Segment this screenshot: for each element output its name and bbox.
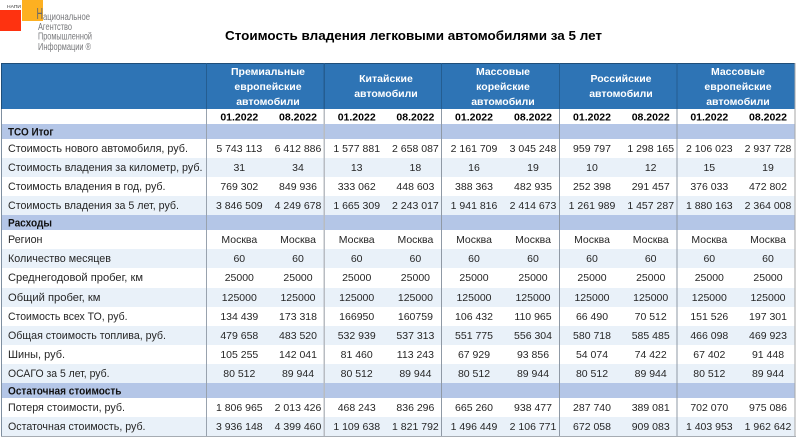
row: Стоимость всех ТО: Стоимость всех ТО, руб. (8, 311, 128, 323)
row: Количество месяцев: 60 (762, 253, 774, 265)
row: Регион: Москва (750, 234, 786, 246)
row: Общая стоимость топлива: 551 775 (455, 330, 493, 342)
row: Потеря стоимости: 468 243 (338, 402, 376, 414)
column heading: Массовые европейские автомобили (704, 66, 772, 108)
column heading: Российские автомобили: автомобили (589, 88, 653, 100)
row: Остаточная стоимость: Остаточная стоимость, руб. (8, 421, 146, 433)
row: Стоимость владения в год: 482 935 (514, 181, 552, 193)
column heading: Китайские автомобили: автомобили (354, 88, 418, 100)
row: Стоимость нового автомобиля: Стоимость нового автомобиля, руб. (8, 143, 188, 155)
row: ОСАГО за 5 лет: 89 944 (282, 368, 314, 380)
row: Общая стоимость топлива: 580 718 (573, 330, 611, 342)
date row: 01.2022 (338, 112, 376, 124)
row: Среднегодовой пробег: 25000 (695, 272, 724, 284)
row: Шины: 81 460 (341, 349, 373, 361)
row: Регион: Регион (8, 234, 42, 246)
row: Общий пробег: 125000 (339, 292, 374, 304)
row: Потеря стоимости: 389 081 (632, 402, 670, 414)
column heading: Массовые европейские автомобили: европейские (704, 81, 772, 93)
row: Стоимость владения за 5 лет: 1 941 816 (451, 200, 498, 212)
row: Остаточная стоимость: 1 109 638 (333, 421, 380, 433)
row: Потеря стоимости: 836 296 (396, 402, 435, 414)
row: Стоимость владения за километр: 12 (645, 162, 657, 174)
row: Общая стоимость топлива: 466 098 (690, 330, 728, 342)
row: ОСАГО за 5 лет: 80 512 (458, 368, 490, 380)
logo: Промышленной (38, 32, 92, 42)
row: Регион: Москва (574, 234, 610, 246)
row: Стоимость нового автомобиля: 2 161 709 (451, 143, 498, 155)
row: Стоимость владения в год: 252 398 (573, 181, 611, 193)
row: Шины: 67 402 (693, 349, 726, 361)
row: Общий пробег: Общий пробег, км (8, 292, 100, 304)
row: Регион: Москва (339, 234, 375, 246)
section band: Расходы (1, 215, 795, 230)
row: Количество месяцев: Количество месяцев (8, 253, 111, 265)
logo (0, 0, 92, 53)
row: Потеря стоимости: 702 070 (690, 402, 728, 414)
row: Стоимость владения за 5 лет: 1 880 163 (686, 200, 733, 212)
row: Регион: Москва (691, 234, 727, 246)
row: Потеря стоимости: 1 806 965 (216, 402, 263, 414)
column heading: Российские автомобили: Российские (590, 73, 652, 85)
row: Потеря стоимости: 975 086 (749, 402, 787, 414)
row: Количество месяцев: 60 (468, 253, 480, 265)
row: Количество месяцев: 60 (586, 253, 598, 265)
row: Стоимость владения за 5 лет: 2 364 008 (745, 200, 792, 212)
row: ОСАГО за 5 лет: 89 944 (517, 368, 549, 380)
logo: Агентство (38, 22, 72, 33)
row: Стоимость владения в год: 849 936 (279, 181, 317, 193)
row: Количество месяцев: 60 (351, 253, 363, 265)
row: Остаточная стоимость: 909 083 (632, 421, 670, 433)
row: Общий пробег: 125000 (280, 292, 316, 304)
row: Потеря стоимости: 2 013 426 (275, 402, 322, 414)
date row: 08.2022 (632, 112, 670, 124)
row: Количество месяцев: 60 (233, 253, 245, 265)
row: Стоимость владения в год: 388 363 (455, 181, 493, 193)
logo: ациональное (43, 12, 90, 23)
row: Регион: Москва (456, 234, 492, 246)
row: Общий пробег: 125000 (456, 292, 492, 304)
row: Стоимость владения в год: 472 802 (749, 181, 787, 193)
row: Шины: 142 041 (279, 349, 317, 361)
column heading: Российские автомобили (589, 73, 653, 100)
row: Стоимость владения за 5 лет: 1 261 989 (569, 200, 616, 212)
row: Остаточная стоимость (8, 421, 792, 433)
row: Остаточная стоимость: 1 403 953 (686, 421, 733, 433)
row: Среднегодовой пробег: 25000 (577, 272, 607, 284)
row: Потеря стоимости: 665 260 (455, 402, 493, 414)
row: Шины: 113 243 (397, 349, 434, 361)
row: Стоимость нового автомобиля: 5 743 113 (216, 143, 262, 155)
row: Регион: Москва (280, 234, 316, 246)
row: Количество месяцев: 60 (703, 253, 715, 265)
row: Общий пробег: 125000 (222, 292, 257, 304)
row: Стоимость нового автомобиля: 2 937 728 (745, 143, 792, 155)
date row: 01.2022 (690, 112, 728, 124)
row: Стоимость нового автомобиля: 3 045 248 (510, 143, 557, 155)
row: Стоимость владения за километр: Стоимость владения за километр, руб. (8, 162, 202, 174)
row: ОСАГО за 5 лет: 80 512 (341, 368, 373, 380)
row: Среднегодовой пробег (8, 272, 783, 284)
row: Стоимость владения в год: 769 302 (220, 181, 258, 193)
row: Количество месяцев: 60 (645, 253, 657, 265)
row: Шины: 105 255 (220, 349, 258, 361)
row: ОСАГО за 5 лет: 89 944 (399, 368, 432, 380)
column heading: Массовые европейские автомобили: автомобили (706, 96, 770, 108)
row: Шины: 91 448 (752, 349, 784, 361)
row: Шины: 74 422 (635, 349, 667, 361)
column heading: Массовые корейские автомобили: корейские (476, 81, 530, 93)
date row: 01.2022 (220, 112, 258, 124)
row: Стоимость владения за километр: 19 (762, 162, 774, 174)
row: Стоимость владения за километр (8, 162, 774, 174)
row: Стоимость нового автомобиля: 6 412 886 (275, 143, 322, 155)
row: Стоимость всех ТО: 151 526 (690, 311, 728, 323)
row: Потеря стоимости (8, 402, 787, 414)
row: Стоимость всех ТО: 160759 (398, 311, 433, 323)
row: Общий пробег (8, 292, 786, 304)
row: Общая стоимость топлива: 469 923 (749, 330, 787, 342)
row: Потеря стоимости: 938 477 (514, 402, 552, 414)
row: Стоимость нового автомобиля: 1 298 165 (627, 143, 674, 155)
row: Стоимость всех ТО: 166950 (339, 311, 374, 323)
section band: ТСО Итог (1, 124, 795, 139)
row: Стоимость владения за 5 лет: Стоимость владения за 5 лет, руб. (8, 200, 179, 212)
row: Количество месяцев: 60 (410, 253, 421, 265)
row: Общая стоимость топлива: 479 658 (220, 330, 258, 342)
row: Стоимость нового автомобиля: 1 577 881 (333, 143, 380, 155)
row: Среднегодовой пробег: 25000 (342, 272, 371, 284)
row: Среднегодовой пробег: 25000 (636, 272, 665, 284)
row: Общая стоимость топлива: 532 939 (338, 330, 376, 342)
row: Остаточная стоимость: 4 399 460 (275, 421, 322, 433)
row: Стоимость всех ТО (8, 311, 787, 323)
date row: 01.2022 (573, 112, 611, 124)
row: Общая стоимость топлива: 483 520 (279, 330, 317, 342)
row: Стоимость всех ТО: 110 965 (514, 311, 552, 323)
section label: Расходы: Расходы (8, 218, 52, 230)
row: Регион: Москва (221, 234, 257, 246)
row: Количество месяцев: 60 (527, 253, 539, 265)
row: Стоимость владения за километр: 18 (410, 162, 421, 174)
row: Стоимость владения за 5 лет: 4 249 678 (275, 200, 322, 212)
row: ОСАГО за 5 лет: 89 944 (752, 368, 784, 380)
row: Стоимость нового автомобиля: 959 797 (573, 143, 611, 155)
row: Стоимость владения за 5 лет: 1 457 287 (627, 200, 674, 212)
section label: Остаточная стоимость: Остаточная стоимость (8, 386, 122, 398)
row: Стоимость владения в год: Стоимость владения в год, руб. (8, 181, 166, 193)
column heading: Китайские автомобили (354, 73, 418, 100)
row: Шины: Шины, руб. (8, 349, 65, 361)
row: Стоимость всех ТО: 70 512 (635, 311, 667, 323)
row: Стоимость владения за километр: 31 (233, 162, 245, 174)
row: Стоимость владения за километр: 16 (468, 162, 480, 174)
row: ОСАГО за 5 лет: 80 512 (223, 368, 256, 380)
date row: 08.2022 (514, 112, 552, 124)
row: Среднегодовой пробег: 25000 (753, 272, 783, 284)
row: Стоимость нового автомобиля: 2 106 023 (686, 143, 733, 155)
table header band (1, 63, 795, 109)
row: Среднегодовой пробег: 25000 (401, 272, 430, 284)
column heading: Массовые европейские автомобили: Массовые (711, 66, 765, 78)
row: ОСАГО за 5 лет (8, 368, 784, 380)
row: Стоимость владения за 5 лет: 3 846 509 (216, 200, 263, 212)
row: Среднегодовой пробег: 25000 (283, 272, 313, 284)
column heading: Премиальные европейские автомобили: автомобили (236, 96, 300, 108)
row: Стоимость нового автомобиля: 2 658 087 (392, 143, 439, 155)
row: Общий пробег: 125000 (515, 292, 551, 304)
row: Среднегодовой пробег: 25000 (225, 272, 254, 284)
row: Регион: Москва (515, 234, 551, 246)
title: Стоимость владения легковыми автомобилями за 5 лет (225, 28, 602, 43)
row: Остаточная стоимость: 1 821 792 (392, 421, 439, 433)
section band: Остаточная стоимость (1, 383, 795, 398)
row: Стоимость владения за километр: 15 (703, 162, 715, 174)
row: Стоимость владения в год: 333 062 (338, 181, 376, 193)
column heading: Премиальные европейские автомобили: Премиальные (231, 66, 305, 78)
date row: 08.2022 (279, 112, 317, 124)
row: Общий пробег: 125000 (692, 292, 727, 304)
row: ОСАГО за 5 лет: 80 512 (576, 368, 608, 380)
date row: 08.2022 (749, 112, 787, 124)
row: ОСАГО за 5 лет: 89 944 (635, 368, 667, 380)
row: Стоимость владения за 5 лет: 2 414 673 (510, 200, 557, 212)
row: Регион: Москва (633, 234, 669, 246)
row: Стоимость владения за километр: 19 (527, 162, 539, 174)
row: Остаточная стоимость: 2 106 771 (510, 421, 557, 433)
row: Потеря стоимости: 287 740 (573, 402, 611, 414)
row: Стоимость всех ТО: 173 318 (279, 311, 317, 323)
row: ОСАГО за 5 лет: 80 512 (693, 368, 726, 380)
row: Остаточная стоимость: 672 058 (573, 421, 611, 433)
row: Стоимость владения в год: 448 603 (396, 181, 435, 193)
row: Шины: 54 074 (576, 349, 608, 361)
row: Среднегодовой пробег: 25000 (518, 272, 548, 284)
row: Общий пробег: 125000 (633, 292, 668, 304)
row: Стоимость владения за километр: 13 (351, 162, 363, 174)
row: Шины: 93 856 (517, 349, 549, 361)
row: Количество месяцев (8, 253, 774, 265)
column heading: Премиальные европейские автомобили: европейские (234, 81, 302, 93)
date row: 01.2022 (455, 112, 493, 124)
row: Стоимость всех ТО: 134 439 (220, 311, 258, 323)
row: Остаточная стоимость: 3 936 148 (216, 421, 263, 433)
row: Шины: 67 929 (458, 349, 490, 361)
row: Регион (8, 234, 786, 246)
row: Стоимость владения в год: 376 033 (690, 181, 728, 193)
row: Количество месяцев: 60 (292, 253, 304, 265)
column heading: Китайские автомобили: Китайские (359, 73, 413, 85)
row: Общий пробег: 125000 (750, 292, 786, 304)
row: ОСАГО за 5 лет: ОСАГО за 5 лет, руб. (8, 368, 110, 380)
row: Стоимость владения за километр: 34 (292, 162, 304, 174)
row: Общий пробег: 125000 (574, 292, 610, 304)
logo: НАПИ (7, 4, 21, 9)
row: Стоимость владения за 5 лет: 2 243 017 (392, 200, 439, 212)
date row: 08.2022 (396, 112, 435, 124)
row: Потеря стоимости: Потеря стоимости, руб. (8, 402, 125, 414)
column heading: Массовые корейские автомобили (471, 66, 535, 108)
row: Стоимость нового автомобиля (8, 143, 792, 155)
row: Стоимость владения в год: 291 457 (632, 181, 670, 193)
row: Стоимость всех ТО: 66 490 (576, 311, 608, 323)
logo: Н (36, 6, 43, 23)
column heading: Массовые корейские автомобили: Массовые (476, 66, 530, 78)
row: Стоимость владения в год (8, 181, 787, 193)
row: Общий пробег: 125000 (398, 292, 433, 304)
column heading: Массовые корейские автомобили: автомобили (471, 96, 535, 108)
row: Стоимость владения за километр: 10 (586, 162, 598, 174)
row: Стоимость всех ТО: 197 301 (749, 311, 787, 323)
logo: Информации ® (38, 41, 91, 53)
row: Остаточная стоимость: 1 496 449 (451, 421, 498, 433)
row: Общая стоимость топлива: 556 304 (514, 330, 552, 342)
column heading: Премиальные европейские автомобили (231, 66, 305, 108)
row: Шины (8, 349, 784, 361)
row: Стоимость владения за 5 лет (8, 200, 792, 212)
section label: ТСО Итог: ТСО Итог (8, 126, 54, 138)
row: Стоимость владения за 5 лет: 1 665 309 (333, 200, 380, 212)
date row (220, 112, 787, 124)
row: Регион: Москва (397, 234, 433, 246)
row: Общая стоимость топлива: Общая стоимость топлива, руб. (8, 330, 166, 342)
row: Остаточная стоимость: 1 962 642 (745, 421, 792, 433)
row: Общая стоимость топлива: 585 485 (632, 330, 670, 342)
row: Среднегодовой пробег: Среднегодовой пробег, км (8, 272, 143, 284)
row: Общая стоимость топлива: 537 313 (396, 330, 435, 342)
row: Общая стоимость топлива (8, 330, 787, 342)
row: Стоимость всех ТО: 106 432 (455, 311, 493, 323)
row: Среднегодовой пробег: 25000 (459, 272, 489, 284)
